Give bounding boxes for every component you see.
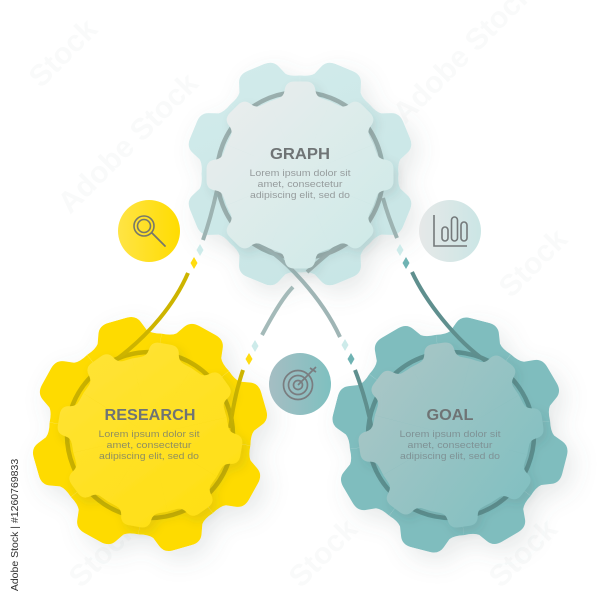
watermark text: Stock bbox=[283, 513, 364, 594]
text block: graph: adipiscing elit, sed do bbox=[250, 190, 350, 201]
dashes bbox=[190, 244, 410, 365]
panel: graph bbox=[206, 82, 400, 276]
text block: graph: amet, consectetur bbox=[258, 179, 342, 190]
text block: goal: amet, consectetur bbox=[408, 440, 492, 451]
heading: graph: GRAPH bbox=[270, 146, 330, 163]
text block: research: Lorem ipsum dolor sit bbox=[98, 429, 200, 440]
watermark text: Stock bbox=[63, 513, 144, 594]
connector curves bbox=[113, 190, 487, 430]
watermark text: Stock bbox=[493, 223, 574, 304]
panel: goal bbox=[358, 342, 546, 531]
watermark text: Stock bbox=[483, 513, 564, 594]
outer gear: graph bbox=[188, 62, 420, 296]
panel: research bbox=[58, 342, 248, 534]
inner gear: graph bbox=[206, 82, 400, 276]
inner gear: research bbox=[58, 342, 248, 534]
heading: research: RESEARCH bbox=[104, 407, 196, 424]
icon: bar chart badge bbox=[419, 200, 481, 262]
stock id caption: Adobe Stock | #1260769833 bbox=[9, 459, 21, 591]
outer gear: research bbox=[32, 317, 276, 562]
inner gear: goal bbox=[358, 342, 546, 531]
text block: goal: Lorem ipsum dolor sit bbox=[400, 429, 501, 440]
watermark text: Adobe Stock bbox=[52, 67, 205, 220]
gear rings bbox=[67, 92, 534, 518]
heading: goal: GOAL bbox=[426, 407, 474, 424]
icon: magnifier badge bbox=[118, 200, 180, 262]
text block: research bbox=[98, 429, 200, 462]
outer gear: goal bbox=[332, 318, 577, 564]
text block: graph: Lorem ipsum dolor sit bbox=[250, 168, 351, 179]
text block: goal bbox=[400, 429, 501, 462]
text block: goal: adipiscing elit, sed do bbox=[400, 451, 500, 462]
text block: graph bbox=[250, 168, 351, 201]
text block: research: adipiscing elit, sed do bbox=[99, 451, 199, 462]
watermark text: Stock bbox=[23, 13, 104, 94]
text block: research: amet, consectetur bbox=[106, 440, 192, 451]
icon: target badge bbox=[269, 353, 331, 415]
